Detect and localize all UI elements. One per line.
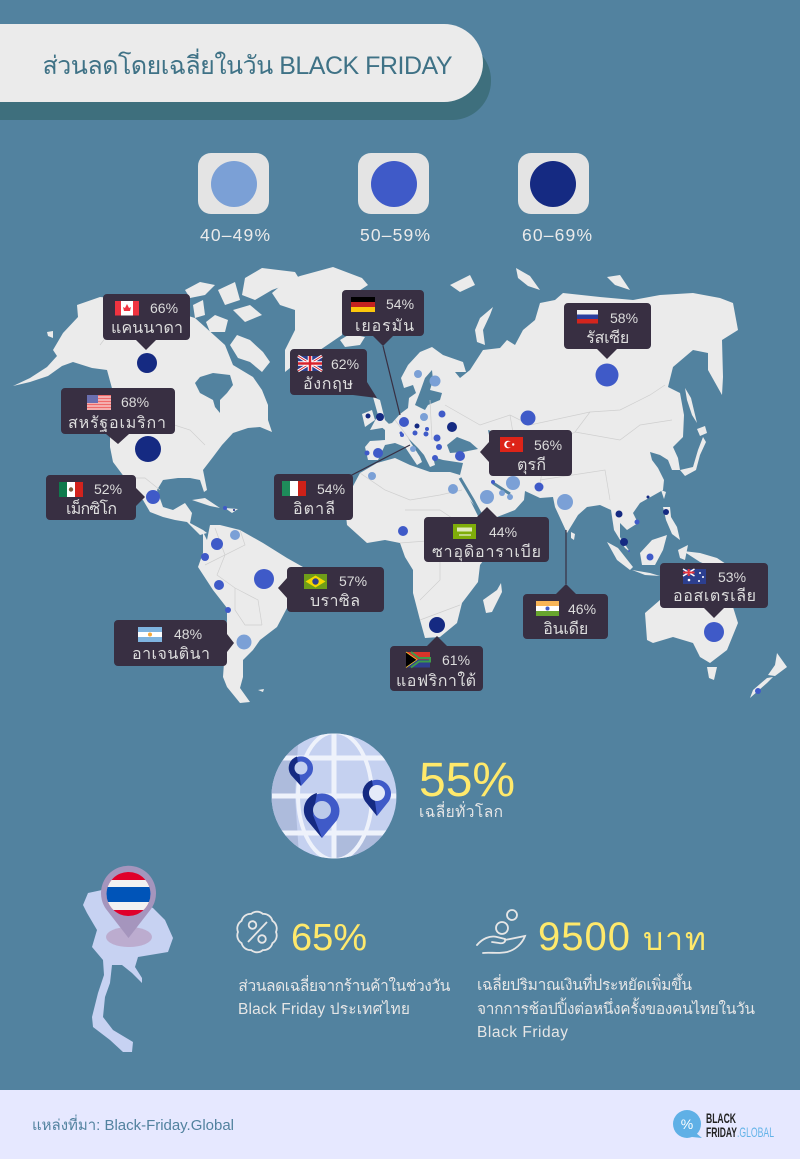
callout: Canada <box>103 294 190 350</box>
callout: South Africa <box>390 636 483 691</box>
callout: South Africa: แอฟริกาใต้ <box>396 671 476 690</box>
callout: Argentina: 48% <box>174 626 202 642</box>
callout: Canada: 66% <box>150 300 178 316</box>
stat: Thailand discount: 65% <box>291 917 367 959</box>
callout: Australia: ออสเตรเลีย <box>673 587 756 605</box>
callout: Australia <box>660 563 768 618</box>
callout: Brazil <box>278 567 384 612</box>
legend: 60–69% <box>522 225 592 245</box>
logo <box>673 1110 774 1140</box>
callout: Mexico: 52% <box>94 481 122 497</box>
callout: Russia <box>564 303 651 359</box>
callout: Italy: อิตาลี <box>293 500 335 518</box>
callout: Saudi Arabia: 44% <box>489 524 517 540</box>
map data dots <box>135 353 761 694</box>
callout: Germany: 54% <box>386 296 414 312</box>
callout: India: อินเดีย <box>543 620 588 638</box>
stat: savings per purchase: บาท <box>643 921 706 957</box>
callout: Brazil: 57% <box>339 573 367 589</box>
logo: .GLOBAL <box>737 1124 774 1140</box>
legend <box>198 153 592 245</box>
callout: Mexico <box>46 475 145 520</box>
callout: India <box>523 584 608 639</box>
legend: 40–49% <box>200 225 270 245</box>
stat: Thailand discount: ส่วนลดเฉลี่ยจากร้านค้าในช่วงวัน <box>238 975 451 995</box>
logo: FRIDAY <box>706 1124 737 1140</box>
callout: Canada: แคนนาดา <box>111 320 183 337</box>
icon: discount badge <box>237 912 277 952</box>
logo: % <box>681 1116 693 1132</box>
pin: small left <box>289 756 313 786</box>
callout: USA: สหรัฐอเมริกา <box>68 415 166 432</box>
callout: USA <box>61 388 175 444</box>
callout: USA: 68% <box>121 394 149 410</box>
pin: large center <box>304 793 340 838</box>
callout: UK: 62% <box>331 356 359 372</box>
callout: UK <box>290 349 377 398</box>
logo: BLACK <box>706 1110 736 1126</box>
callout: Argentina: อาเจนตินา <box>132 646 210 663</box>
stat: savings per purchase <box>477 915 755 1041</box>
callout: Saudi Arabia: ซาอุดิอาราเบีย <box>432 543 541 562</box>
stat: savings per purchase: จากการช้อปปิ้งต่อหนึ่งครั้งของคนไทยในวัน <box>477 997 755 1018</box>
global average stat: เฉลี่ยทั่วโลก <box>419 801 503 821</box>
callout: South Africa: 61% <box>442 652 470 668</box>
Thailand map with pin <box>83 866 173 1052</box>
legend: 50–59% <box>360 225 430 245</box>
connector lines <box>350 346 566 584</box>
world map <box>13 267 787 703</box>
stat: savings per purchase: 9500 <box>538 915 630 959</box>
stat: Thailand discount: Black Friday ประเทศไทย <box>238 1000 410 1018</box>
stat: savings per purchase: เฉลี่ยปริมาณเงินที่ประหยัดเพิ่มขึ้น <box>477 973 692 994</box>
callout: Russia: 58% <box>610 310 638 326</box>
callout: Australia: 53% <box>718 569 746 585</box>
callout: Argentina <box>114 620 234 666</box>
icon: globe with pins <box>272 734 396 858</box>
callout: Turkey <box>480 430 572 476</box>
callout: Saudi Arabia <box>424 507 549 562</box>
callout: Germany <box>342 290 424 346</box>
title banner <box>0 24 491 120</box>
stat: Thailand discount <box>238 917 451 1018</box>
callout: India: 46% <box>568 601 596 617</box>
callout: Turkey: 56% <box>534 437 562 453</box>
country borders <box>100 328 672 625</box>
callout: Turkey: ตุรกี <box>517 456 546 475</box>
callout: Brazil: บราซิล <box>310 593 360 610</box>
stat: savings per purchase: Black Friday <box>477 1024 568 1041</box>
pin: right <box>363 780 391 816</box>
callout: Italy <box>274 474 353 520</box>
callout: Russia: รัสเซีย <box>586 329 629 347</box>
icon: hand with coins <box>477 910 525 953</box>
footer: แหล่งที่มา: Black-Friday.Global <box>32 1114 234 1134</box>
footer <box>0 1090 800 1159</box>
callout: Germany: เยอรมัน <box>355 318 414 335</box>
callout: Italy: 54% <box>317 481 345 497</box>
callout: UK: อังกฤษ <box>303 376 353 393</box>
title banner: ส่วนลดโดยเฉลี่ยในวัน BLACK FRIDAY <box>43 48 453 80</box>
callout: Mexico: เม็กซิโก <box>66 498 117 518</box>
global average stat: 55% <box>419 754 515 807</box>
